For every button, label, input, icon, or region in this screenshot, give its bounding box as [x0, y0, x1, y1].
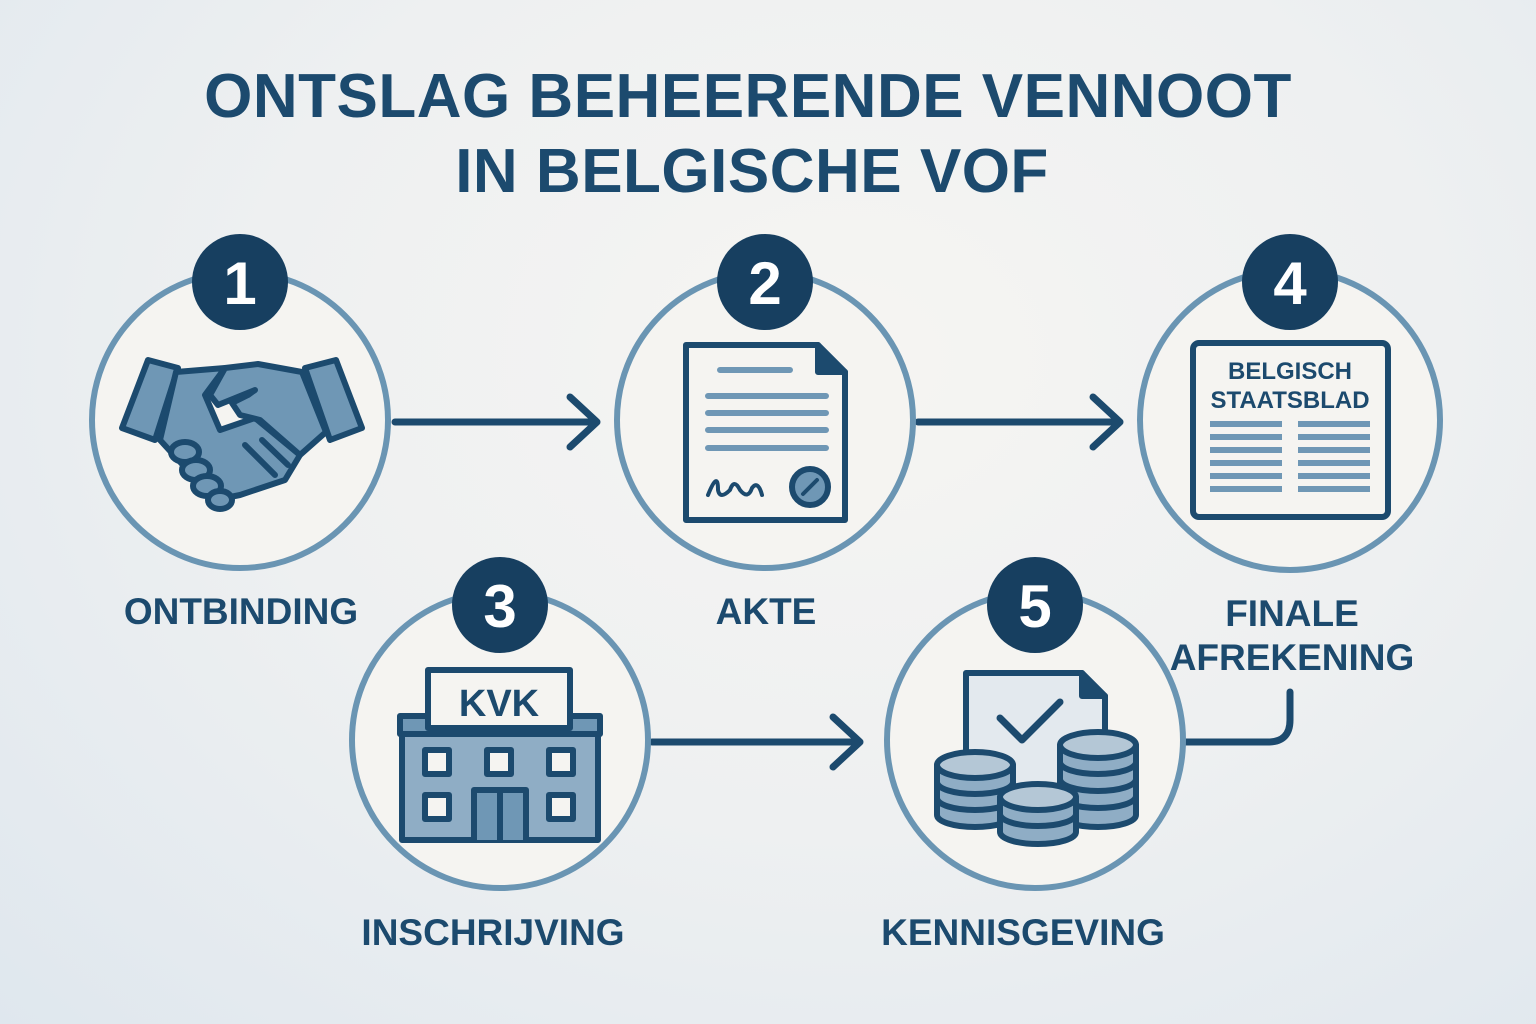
- step 4 circle: staatsblad: [1140, 270, 1440, 570]
- badge 2: [717, 234, 813, 330]
- title: [204, 62, 1292, 206]
- label: FINALE AFREKENING: FINALE: [1225, 593, 1359, 634]
- badge 3: 3: [483, 573, 517, 640]
- step 1 circle: handshake: [92, 272, 388, 568]
- icon: KVK building: KVK: [459, 683, 540, 725]
- icon: document and coins: [937, 673, 1136, 844]
- label: INSCHRIJVING: INSCHRIJVING: [361, 912, 625, 953]
- icon: newspaper: [1193, 343, 1388, 517]
- icon: newspaper: STAATSBLAD: [1210, 387, 1370, 414]
- icon: document with signature: [686, 345, 845, 520]
- connector: 4 to 5: [1186, 692, 1290, 742]
- badge 1: [192, 234, 288, 330]
- badge 5: [987, 557, 1083, 653]
- title: IN BELGISCHE VOF: [455, 137, 1049, 206]
- label: FINALE AFREKENING: [1170, 593, 1414, 678]
- badge 1: 1: [223, 250, 257, 317]
- label: KENNISGEVING: KENNISGEVING: [881, 912, 1165, 953]
- icon: newspaper: BELGISCH: [1228, 358, 1352, 385]
- icon: handshake: [122, 360, 362, 509]
- arrow: 2 to 4: [918, 397, 1120, 447]
- label: FINALE AFREKENING: AFREKENING: [1170, 637, 1414, 678]
- title: ONTSLAG BEHEERENDE VENNOOT: [204, 62, 1292, 131]
- arrow: 1 to 2: [395, 397, 597, 447]
- badge 4: [1242, 234, 1338, 330]
- arrow: 3 to 5: [652, 717, 860, 767]
- icon: KVK building: [400, 670, 600, 840]
- badge 5: 5: [1018, 573, 1052, 640]
- label: AKTE: AKTE: [716, 591, 816, 632]
- label: ONTBINDING: ONTBINDING: [124, 591, 358, 632]
- step 3 circle: KVK: [352, 592, 648, 888]
- badge 3: [452, 557, 548, 653]
- step 2 circle: akte: [617, 272, 913, 568]
- step 5 circle: kennisgeving: [887, 592, 1183, 888]
- badge 2: 2: [748, 250, 782, 317]
- badge 4: 4: [1273, 250, 1307, 317]
